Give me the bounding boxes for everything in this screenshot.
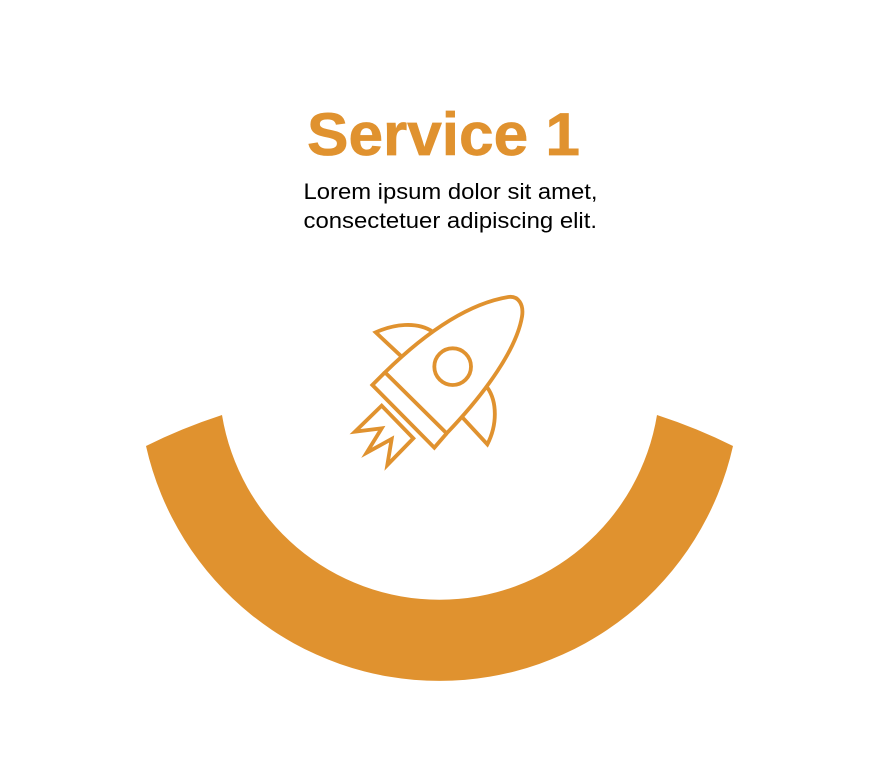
orange semicircular arc — [146, 415, 733, 681]
description text: consectetuer adipiscing elit. — [304, 208, 597, 233]
description text: Lorem ipsum dolor sit amet, — [304, 179, 598, 204]
icon: rocket — [355, 297, 522, 465]
title: Service 1 — [307, 101, 580, 168]
description text — [304, 179, 598, 233]
